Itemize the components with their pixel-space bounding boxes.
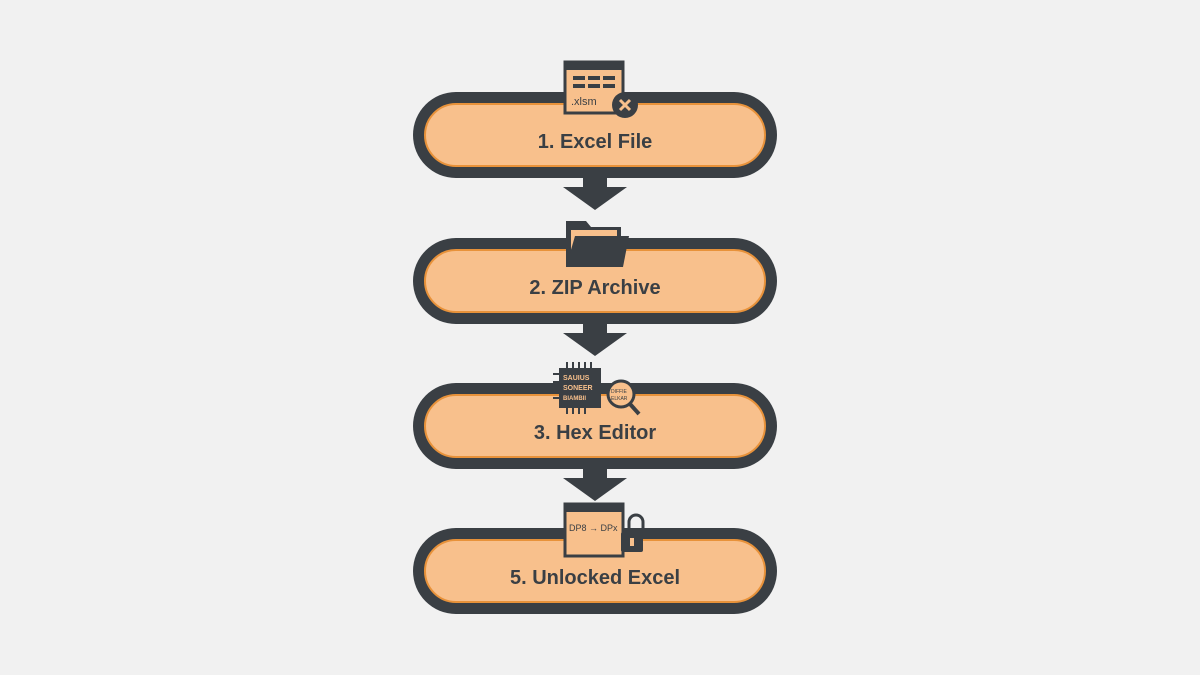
icon: window with unlocked padlock: DP8 → DPx <box>569 523 618 533</box>
step 3 box: 3. Hex Editor <box>534 422 656 444</box>
step 1 box <box>413 92 777 178</box>
icon: chip with magnifier <box>553 362 640 416</box>
icon: xlsm file <box>564 60 638 118</box>
step 5 box <box>413 528 777 614</box>
icon: window with unlocked padlock <box>564 502 644 558</box>
step 5 box: 5. Unlocked Excel <box>510 567 680 589</box>
icon: xlsm file: .xlsm <box>571 96 597 108</box>
icon: chip with magnifier: SONEER <box>563 385 593 392</box>
step 2 box: 2. ZIP Archive <box>529 277 661 299</box>
arrow 2 <box>563 324 627 356</box>
icon: folder <box>566 221 629 267</box>
arrow 1 <box>563 178 627 210</box>
step 2 box <box>413 238 777 324</box>
step 1 box: 1. Excel File <box>538 131 652 153</box>
icon: chip with magnifier: DIFFIE <box>611 389 627 395</box>
icon: chip with magnifier: SAUIUS <box>563 375 590 382</box>
step 3 box <box>413 383 777 469</box>
icon: chip with magnifier: BIAMBII <box>563 396 586 402</box>
icon: chip with magnifier: ELKAR <box>611 396 628 402</box>
arrow 3 <box>563 469 627 501</box>
